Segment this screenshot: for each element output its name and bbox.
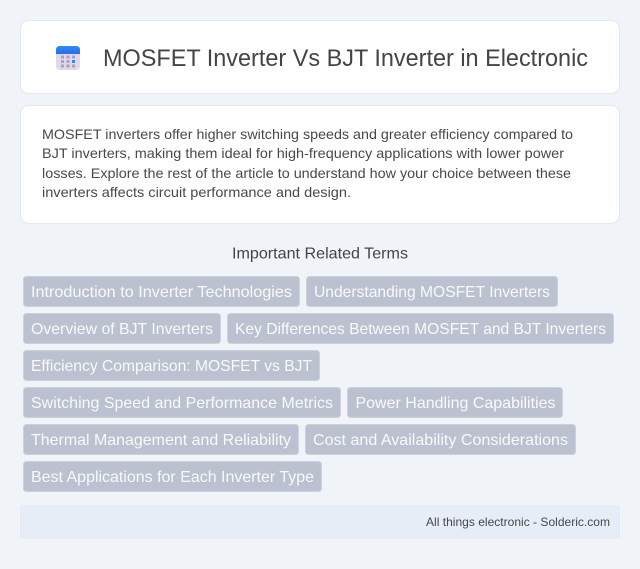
footer (20, 505, 620, 539)
tag: key differences (228, 314, 614, 344)
tag: efficiency comparison (24, 350, 320, 380)
description text: BJT inverters, making them ideal for high-frequency applications with lower power (42, 145, 564, 161)
description text: inverters affects circuit performance and design. (42, 184, 351, 200)
tag: cost and availability (306, 424, 576, 454)
tag: efficiency comparison: Efficiency Comparison: MOSFET vs BJT (31, 358, 312, 375)
tag: overview of BJT (24, 314, 220, 344)
tag: switching speed: Switching Speed and Performance Metrics (31, 395, 333, 412)
tag: overview of BJT: Overview of BJT Inverters (31, 321, 213, 338)
panel: header (20, 20, 620, 94)
tag: best applications: Best Applications for Each Inverter Type (31, 469, 314, 486)
tag: understanding MOSFET: Understanding MOSFET Inverters (314, 284, 550, 301)
icon: calendar (56, 46, 80, 70)
tag: introduction (24, 276, 300, 306)
description text (42, 126, 573, 200)
description text: losses. Explore the rest of the article to understand how your choice between these (42, 165, 571, 181)
footer credit: All things electronic - Solderic.com (426, 515, 610, 529)
tag: power handling (348, 388, 562, 418)
tag: understanding MOSFET (306, 276, 558, 306)
tag: cost and availability: Cost and Availability Considerations (313, 432, 568, 449)
tag: thermal management: Thermal Management and Reliability (31, 432, 291, 449)
heading: important related terms: Important Related Terms (232, 246, 408, 262)
tag: best applications (24, 462, 322, 492)
tag: switching speed (24, 388, 340, 418)
title: MOSFET Inverter Vs BJT Inverter in Electronic (103, 45, 588, 72)
tag: introduction: Introduction to Inverter Technologies (31, 284, 292, 301)
tag: power handling: Power Handling Capabilities (356, 395, 556, 412)
panel: description (20, 106, 620, 224)
tag list (24, 276, 614, 492)
description text: MOSFET inverters offer higher switching speeds and greater efficiency compared to (42, 126, 573, 142)
tag: key differences: Key Differences Between MOSFET and BJT Inverters (235, 321, 606, 338)
tag: thermal management (24, 424, 298, 454)
